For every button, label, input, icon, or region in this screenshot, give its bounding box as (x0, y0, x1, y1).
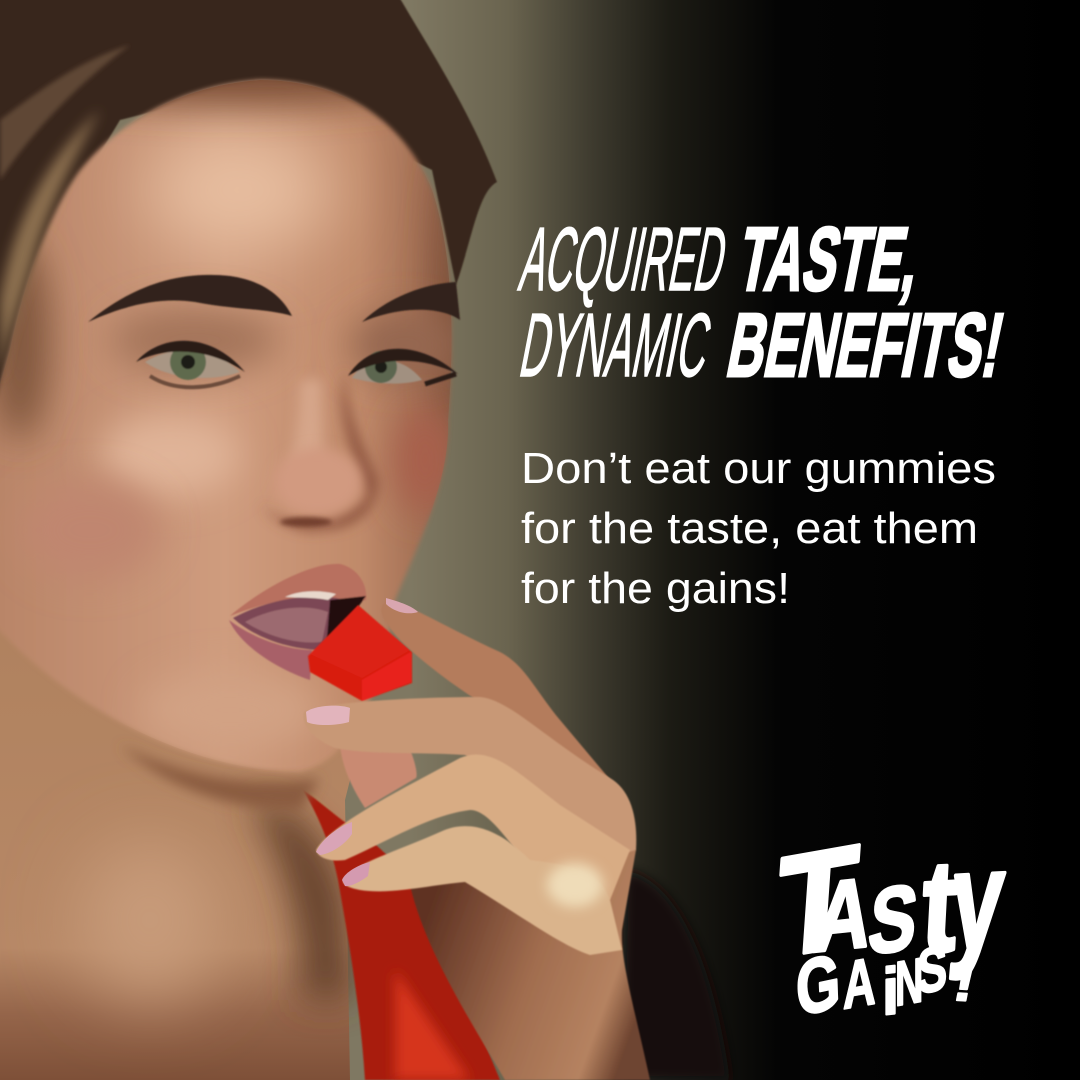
lower lip (229, 620, 312, 680)
left lower lash (150, 376, 240, 387)
nose (262, 370, 378, 531)
logo letter A: A (843, 944, 876, 1024)
neck shadow (250, 800, 352, 1000)
heading: DYNAMIC (513, 296, 719, 396)
neck and chest (0, 560, 360, 1080)
logo letter S: S (864, 864, 923, 974)
right lash wing (425, 374, 456, 384)
logo letter N: N (895, 945, 923, 1020)
left temple shadow (0, 240, 50, 440)
body line 2: for the taste, eat them (521, 504, 978, 553)
index nail (386, 598, 418, 613)
left eyebrow (88, 275, 292, 322)
face shading (0, 80, 452, 746)
tongue (245, 607, 328, 643)
heading word: TASTE,: TASTE, (731, 210, 929, 310)
logo word: Gains! (795, 932, 981, 1033)
red top highlight (395, 970, 470, 1080)
logo: Tasty Gains (772, 815, 1010, 1033)
collarbone highlight (80, 840, 220, 1000)
body line 1: Don’t eat our gummies (521, 444, 996, 493)
heading: ACQUIRED (513, 210, 735, 310)
lips (229, 564, 366, 680)
palm (410, 830, 650, 1080)
ring nail (316, 822, 352, 855)
right eyebrow (362, 282, 460, 322)
right eye (348, 349, 458, 384)
right lash (348, 349, 458, 376)
blonde hair streaks (0, 110, 100, 380)
left iris (170, 344, 206, 380)
right iris (365, 351, 397, 383)
little finger (343, 826, 622, 955)
left lash (136, 341, 245, 372)
index finger (381, 602, 612, 782)
right edge shadow (421, 189, 452, 415)
red top (303, 790, 500, 1080)
heading (513, 210, 1012, 396)
logo word: Tasty (772, 815, 1010, 989)
chin shadow (120, 745, 320, 810)
face (0, 80, 451, 772)
gummy front (308, 605, 412, 701)
gummy top (310, 606, 410, 678)
forehead highlight (145, 130, 335, 250)
left eye (136, 341, 245, 387)
teeth (285, 591, 336, 600)
rosy cheek left (90, 474, 157, 562)
cheek highlight (100, 413, 240, 497)
jaw highlight (154, 680, 315, 746)
forehead top shadow (133, 80, 372, 130)
logo letter S: S (917, 932, 947, 1008)
upper lip (230, 564, 366, 616)
right eye white (352, 360, 422, 384)
nose tip (274, 448, 362, 516)
hand highlight (547, 863, 603, 907)
gummy side (362, 652, 411, 701)
logo letter I: i (882, 953, 899, 1029)
right cheek (395, 405, 455, 515)
thumb (340, 745, 417, 808)
photo: woman eating gummy (0, 0, 730, 1080)
logo letter G: G (795, 938, 842, 1033)
eye socket shadows (110, 305, 280, 375)
right pupil (375, 361, 387, 373)
middle nail (306, 706, 350, 725)
shoulder shadow (620, 870, 730, 1080)
logo letter T: t (918, 833, 961, 981)
left hair lights (0, 45, 130, 180)
middle finger (303, 697, 636, 860)
nose shade (262, 370, 378, 531)
red gummy cube (308, 605, 412, 701)
body line 3: for the gains! (521, 564, 790, 613)
hair back (0, 0, 497, 420)
logo letter T: T (772, 815, 862, 989)
left eye white (145, 350, 240, 378)
logo exclamation: ! (949, 952, 981, 1013)
ring finger (316, 755, 630, 900)
little nail (342, 862, 370, 886)
left pupil (181, 355, 195, 369)
mouth shadow (326, 596, 366, 650)
body text (521, 444, 996, 613)
mouth interior (233, 596, 350, 650)
nostril (280, 517, 332, 527)
logo letter Y: y (945, 821, 1010, 981)
logo letter A: A (810, 857, 877, 974)
nose bridge highlight (290, 380, 323, 470)
